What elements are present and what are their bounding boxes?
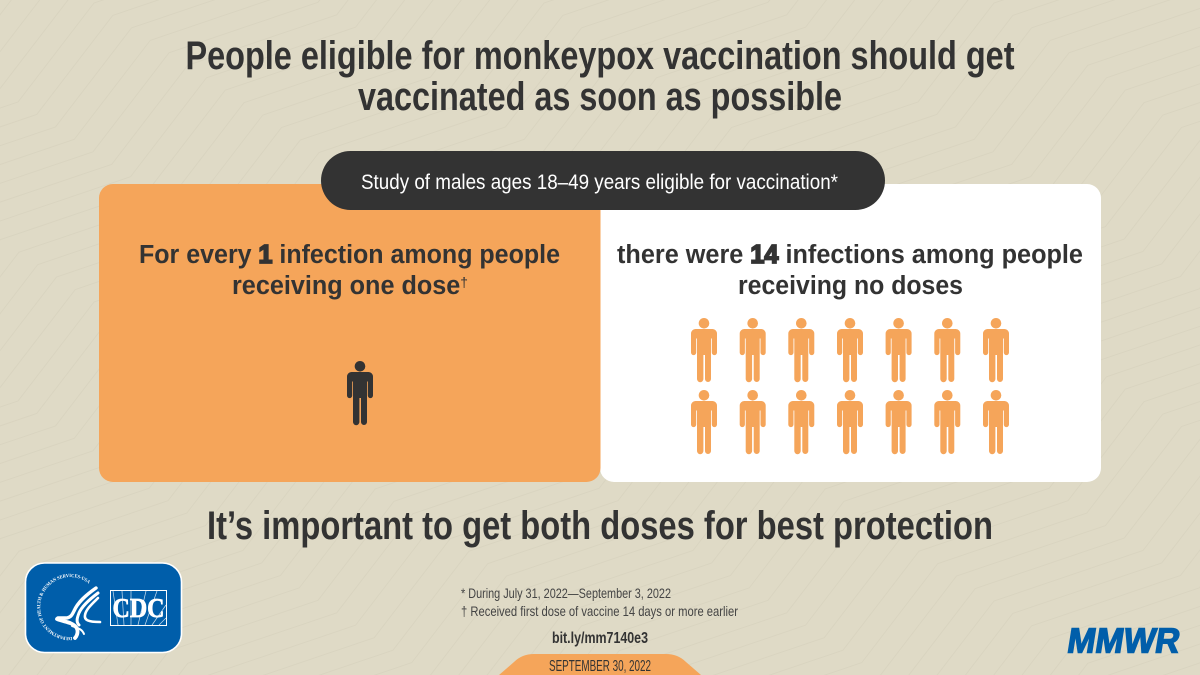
- date tab: SEPTEMBER 30, 2022: [549, 658, 651, 675]
- footnotes: [461, 585, 738, 619]
- link: bit.ly/mm7140e3: [552, 630, 648, 647]
- icon: person, one infection: [347, 361, 373, 425]
- footnotes: † Received first dose of vaccine 14 days or more earlier: [461, 603, 738, 619]
- panel heading: one dose: receiving one dose: [232, 272, 463, 300]
- title: People eligible for monkeypox vaccination should get: [186, 34, 1014, 78]
- panel: one dose: [99, 184, 600, 482]
- panel heading: one dose: For every 1 infection among people: [139, 241, 560, 269]
- HHS seal ring text: DEPARTMENT OF HEALTH & HUMAN SERVICES·USA: [37, 574, 90, 640]
- panel heading: no doses: [617, 241, 1083, 300]
- title: [186, 34, 1014, 119]
- date tab: [499, 654, 701, 675]
- panel heading: one dose: †: [460, 274, 468, 290]
- key message: It’s important to get both doses for best protection: [207, 504, 993, 548]
- CDC mark: CDC: [112, 593, 164, 623]
- panel heading: no doses: receiving no doses: [738, 272, 963, 300]
- panel heading: one dose: [139, 241, 560, 300]
- HHS eagle mark: [57, 588, 100, 638]
- panel heading: no doses: there were 14 infections among people: [617, 241, 1083, 269]
- panel: no doses: [600, 184, 1101, 482]
- footnotes: * During July 31, 2022—September 3, 2022: [461, 585, 671, 601]
- study population pill: Study of males ages 18–49 years eligible for vaccination*: [361, 170, 839, 194]
- title: vaccinated as soon as possible: [358, 75, 842, 119]
- icon group: 14 people, fourteen infections: [691, 318, 1009, 454]
- study population pill: [321, 151, 885, 210]
- logo: HHS and CDC: [24, 562, 182, 654]
- logo: MMWR: MMWR: [1065, 622, 1183, 660]
